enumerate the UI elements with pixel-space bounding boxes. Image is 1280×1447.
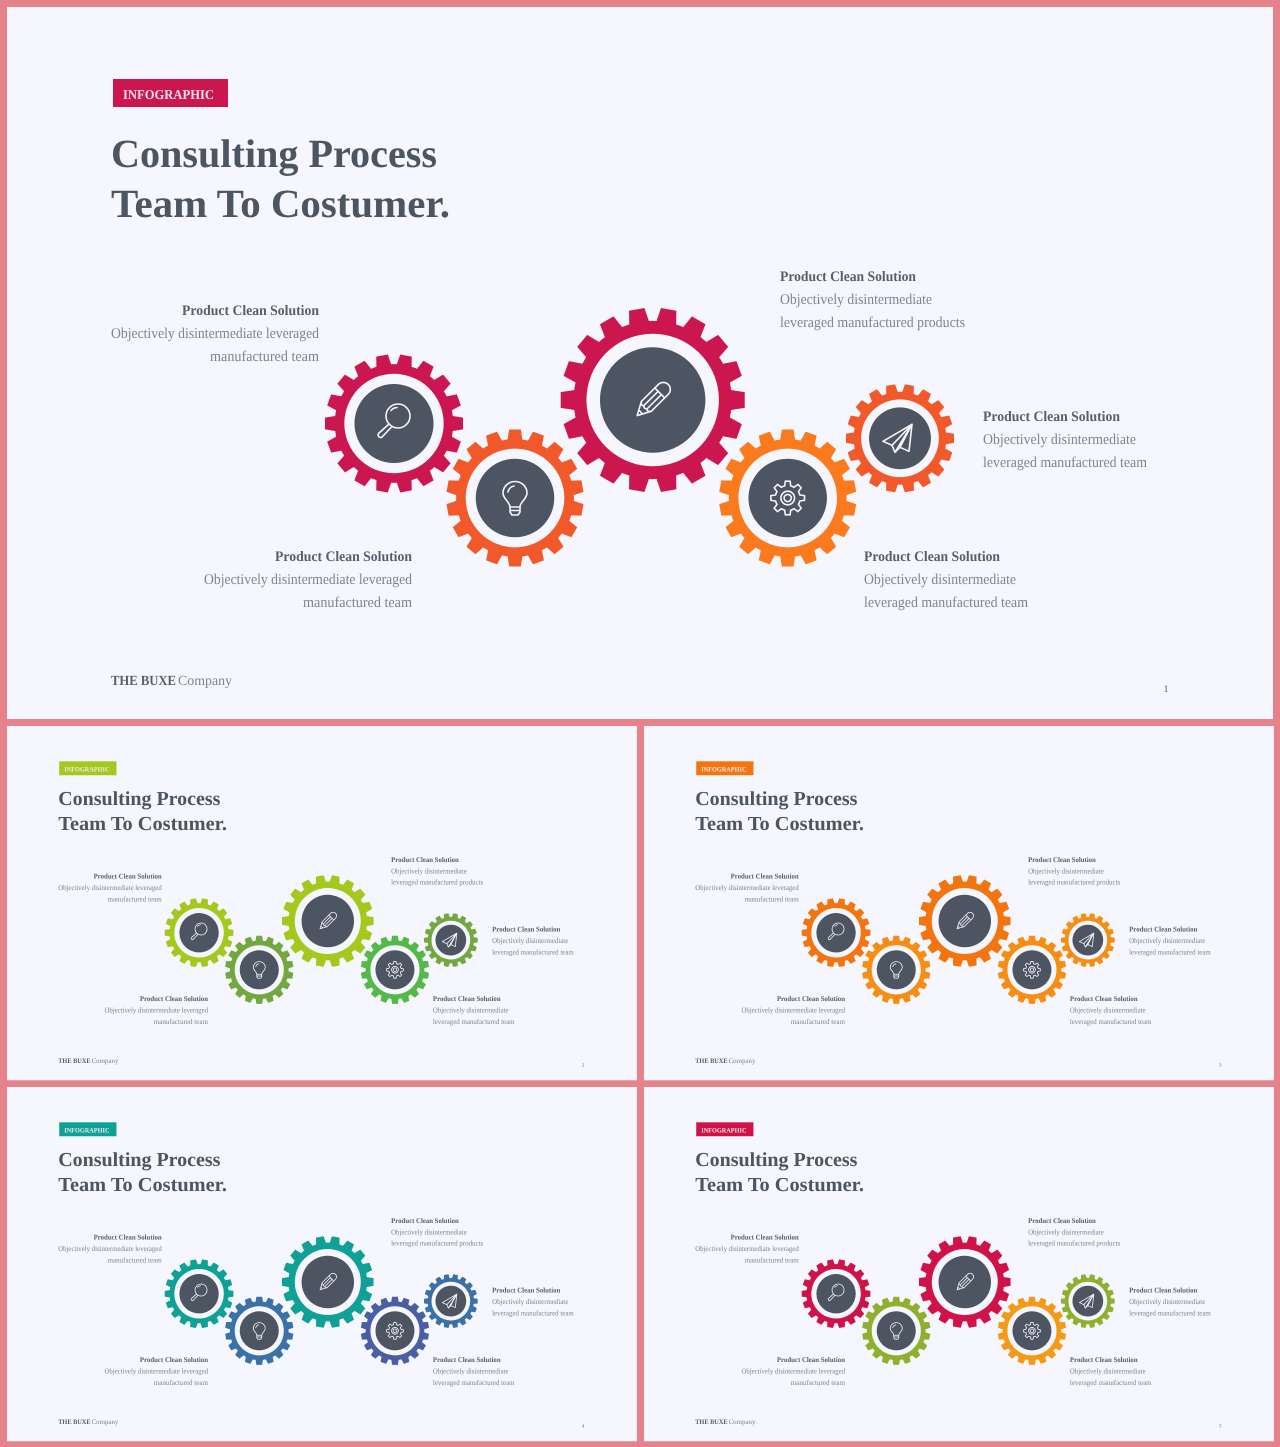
gear 4 — [361, 1297, 429, 1365]
text block: top centre: leveraged manufactured products — [1028, 1240, 1120, 1248]
gear 3 — [275, 868, 381, 974]
text block: bottom right: leveraged manufactured team — [864, 595, 1028, 611]
footer brand: THE BUXE — [695, 1057, 728, 1065]
footer brand — [695, 1057, 755, 1065]
text block: right: Objectively disintermediate — [492, 1298, 568, 1306]
icon: paper plane — [442, 933, 457, 947]
footer brand: THE BUXE — [111, 674, 176, 689]
icon: pencil — [955, 1272, 975, 1292]
text block: top left: manufactured team — [107, 896, 162, 904]
text block: top centre: leveraged manufactured products — [391, 879, 483, 887]
tag: infographic: INFOGRAPHIC — [701, 765, 746, 773]
tag: infographic: INFOGRAPHIC — [64, 1126, 109, 1134]
tag: infographic — [696, 1122, 753, 1136]
text block: bottom right: Objectively disintermediate — [864, 572, 1016, 588]
text block: bottom right: leveraged manufactured team — [1070, 1018, 1152, 1026]
gear 5 — [1057, 1270, 1119, 1332]
icon: cog — [1024, 961, 1040, 978]
text block: bottom left — [204, 549, 412, 611]
text block: top left: Product Clean Solution — [94, 873, 162, 881]
footer brand: THE BUXE — [58, 1418, 91, 1426]
icon: paper plane — [1079, 1294, 1094, 1308]
footer brand — [58, 1418, 118, 1426]
text block: bottom left — [105, 1356, 208, 1387]
text block: top centre: leveraged manufactured products — [1028, 879, 1120, 887]
gear 5 — [420, 909, 482, 971]
title: Team To Costumer. — [695, 1173, 864, 1195]
gear 2 — [862, 936, 930, 1004]
text block: bottom right — [1070, 995, 1152, 1026]
text block: top centre — [391, 856, 483, 887]
icon: pencil — [318, 911, 338, 931]
gear 4 — [998, 1297, 1066, 1365]
text block: top centre: Objectively disintermediate — [780, 292, 932, 308]
footer brand: Company — [92, 1418, 118, 1426]
gear 1 — [159, 1254, 239, 1334]
footer brand — [695, 1418, 755, 1426]
icon: magnifier — [378, 404, 410, 437]
text block: bottom left: Objectively disintermediate leveraged — [204, 572, 412, 588]
title: Team To Costumer. — [111, 181, 450, 226]
text block: top centre: Product Clean Solution — [1028, 856, 1096, 864]
icon: magnifier — [828, 1284, 844, 1301]
text block: right: Product Clean Solution — [1129, 926, 1197, 933]
footer brand: Company — [729, 1057, 755, 1065]
footer brand: THE BUXE — [58, 1057, 91, 1065]
icon: cog — [387, 1322, 403, 1339]
text block: right: leveraged manufactured team — [492, 1309, 574, 1317]
gear 5 — [837, 376, 963, 501]
text block: bottom left: manufactured team — [791, 1018, 845, 1026]
footer brand — [111, 674, 232, 689]
text block: top left — [58, 873, 162, 904]
gear 2 — [446, 430, 584, 566]
icon: magnifier — [191, 923, 207, 940]
text block: bottom left: manufactured team — [303, 595, 412, 611]
text block: right — [492, 1287, 574, 1317]
text block: top centre: leveraged manufactured products — [391, 1240, 483, 1248]
gear 5 — [1057, 909, 1119, 971]
icon: paper plane — [883, 424, 912, 452]
text block: bottom right: Objectively disintermediate — [433, 1368, 509, 1376]
text block: top centre — [780, 269, 965, 331]
footer brand — [58, 1057, 118, 1065]
icon: light bulb — [503, 482, 527, 515]
footer brand: Company — [92, 1057, 118, 1065]
text block: bottom left — [105, 995, 208, 1026]
tag: infographic: INFOGRAPHIC — [64, 765, 109, 773]
icon: cog — [771, 481, 805, 515]
text block: top left: Objectively disintermediate leveraged — [58, 1245, 162, 1253]
text block: right: leveraged manufactured team — [983, 455, 1147, 471]
text block: top left: Objectively disintermediate leveraged — [111, 326, 319, 342]
text block: bottom left: manufactured team — [154, 1018, 208, 1026]
icon: paper plane — [1079, 933, 1094, 947]
text block: bottom right: leveraged manufactured team — [1070, 1379, 1152, 1387]
gear 3 — [912, 868, 1018, 974]
title: Consulting Process — [58, 787, 220, 810]
text block: right — [1129, 1287, 1211, 1317]
tag: infographic — [59, 1122, 116, 1136]
text block: right: Objectively disintermediate — [983, 432, 1136, 448]
text block: top centre: Product Clean Solution — [1028, 1217, 1096, 1225]
footer brand: Company — [178, 674, 232, 689]
text block: top centre — [1028, 1217, 1120, 1248]
text block: top left — [695, 873, 799, 904]
panel: slide 5 multicolour — [644, 1087, 1274, 1441]
text block: bottom left: Product Clean Solution — [777, 995, 845, 1003]
text block: bottom right: leveraged manufactured team — [433, 1018, 515, 1026]
text block: bottom left: Objectively disintermediate leveraged — [742, 1007, 845, 1015]
title — [111, 131, 450, 226]
text block: bottom left: Product Clean Solution — [777, 1356, 845, 1364]
text block: top left: manufactured team — [744, 1257, 799, 1265]
page number: 2 — [582, 1062, 584, 1068]
text block: top centre: Product Clean Solution — [391, 1217, 459, 1225]
text block: top left: Objectively disintermediate leveraged — [695, 1245, 799, 1253]
tag: infographic: INFOGRAPHIC — [123, 87, 214, 102]
gear 1 — [796, 1254, 876, 1334]
text block: bottom left: manufactured team — [154, 1379, 208, 1387]
text block: bottom right: Product Clean Solution — [864, 549, 1000, 565]
text block: right: leveraged manufactured team — [492, 948, 574, 956]
text block: bottom left: Objectively disintermediate leveraged — [742, 1368, 845, 1376]
title — [695, 787, 864, 834]
icon: light bulb — [890, 962, 902, 978]
icon: magnifier — [191, 1284, 207, 1301]
gear 3 — [912, 1229, 1018, 1335]
text block: top left: Product Clean Solution — [731, 873, 799, 881]
gear 1 — [159, 893, 239, 973]
panel: slide 1 crimson (large) — [7, 7, 1273, 719]
text block: top left — [58, 1234, 162, 1265]
text block: bottom left — [742, 995, 845, 1026]
gear 3 — [275, 1229, 381, 1335]
text block: top centre: Product Clean Solution — [780, 269, 916, 285]
icon: magnifier — [828, 923, 844, 940]
icon: light bulb — [253, 962, 265, 978]
title: Consulting Process — [58, 1148, 220, 1171]
text block: right: Objectively disintermediate — [1129, 937, 1205, 945]
text block: bottom right — [433, 1356, 515, 1387]
text block: top centre — [1028, 856, 1120, 887]
text block: bottom right — [1070, 1356, 1152, 1387]
text block: bottom right: leveraged manufactured team — [433, 1379, 515, 1387]
title: Team To Costumer. — [58, 812, 227, 834]
text block: top centre: Objectively disintermediate — [391, 867, 467, 875]
text block: top left: Product Clean Solution — [182, 303, 319, 319]
icon: light bulb — [253, 1323, 265, 1339]
text block: top centre: Objectively disintermediate — [1028, 867, 1104, 875]
icon: cog — [387, 961, 403, 978]
title — [58, 1148, 227, 1195]
text block: bottom left: manufactured team — [791, 1379, 845, 1387]
text block: bottom right — [864, 549, 1028, 611]
text block: bottom right — [433, 995, 515, 1026]
tag: infographic — [59, 761, 116, 775]
text block: right: leveraged manufactured team — [1129, 948, 1211, 956]
text block: bottom right: Product Clean Solution — [433, 1356, 501, 1364]
text block: top left: manufactured team — [210, 349, 319, 365]
page number: 3 — [1219, 1062, 1221, 1068]
icon: pencil — [318, 1272, 338, 1292]
text block: top left: manufactured team — [744, 896, 799, 904]
text block: bottom left: Product Clean Solution — [140, 995, 208, 1003]
text block: top left: manufactured team — [107, 1257, 162, 1265]
gear 4 — [719, 430, 856, 566]
icon: paper plane — [442, 1294, 457, 1308]
gear 4 — [361, 936, 429, 1004]
text block: right: Objectively disintermediate — [492, 937, 568, 945]
text block: right — [1129, 926, 1211, 956]
tag: infographic: INFOGRAPHIC — [701, 1126, 746, 1134]
title: Team To Costumer. — [58, 1173, 227, 1195]
text block: bottom right: Product Clean Solution — [1070, 1356, 1138, 1364]
text block: bottom right: Product Clean Solution — [433, 995, 501, 1003]
page number: 4 — [582, 1423, 584, 1429]
text block: right: Product Clean Solution — [492, 1287, 560, 1294]
text block: top centre: Objectively disintermediate — [1028, 1228, 1104, 1236]
icon: cog — [1024, 1322, 1040, 1339]
title: Consulting Process — [695, 1148, 857, 1171]
gear 2 — [225, 1297, 293, 1365]
footer brand: Company — [729, 1418, 755, 1426]
text block: bottom left: Product Clean Solution — [275, 549, 412, 565]
page number: 1 — [1164, 684, 1168, 695]
title: Consulting Process — [695, 787, 857, 810]
text block: right — [983, 409, 1147, 471]
gear 2 — [225, 936, 293, 1004]
text block: top centre: Objectively disintermediate — [391, 1228, 467, 1236]
text block: bottom left: Objectively disintermediate leveraged — [105, 1368, 208, 1376]
footer brand: THE BUXE — [695, 1418, 728, 1426]
text block: right: Product Clean Solution — [1129, 1287, 1197, 1294]
text block: top left: Product Clean Solution — [731, 1234, 799, 1242]
text block: bottom left — [742, 1356, 845, 1387]
gear 1 — [314, 344, 474, 503]
panel: slide 3 orange — [644, 726, 1274, 1080]
text block: bottom right: Objectively disintermediate — [433, 1007, 509, 1015]
title: Team To Costumer. — [695, 812, 864, 834]
text block: right: leveraged manufactured team — [1129, 1309, 1211, 1317]
text block: top centre: Product Clean Solution — [391, 856, 459, 864]
text block: top left: Product Clean Solution — [94, 1234, 162, 1242]
tag: infographic — [113, 79, 228, 107]
gear 4 — [998, 936, 1066, 1004]
gear 2 — [862, 1297, 930, 1365]
text block: right: Product Clean Solution — [492, 926, 560, 933]
page number: 5 — [1219, 1423, 1221, 1429]
text block: top left — [695, 1234, 799, 1265]
text block: top left: Objectively disintermediate leveraged — [58, 884, 162, 892]
text block: bottom right: Objectively disintermediate — [1070, 1368, 1146, 1376]
title — [58, 787, 227, 834]
title — [695, 1148, 864, 1195]
text block: bottom left: Objectively disintermediate leveraged — [105, 1007, 208, 1015]
text block: bottom right: Objectively disintermediate — [1070, 1007, 1146, 1015]
text block: top centre: leveraged manufactured products — [780, 315, 965, 331]
text block: right: Objectively disintermediate — [1129, 1298, 1205, 1306]
title: Consulting Process — [111, 131, 437, 176]
icon: light bulb — [890, 1323, 902, 1339]
text block: right: Product Clean Solution — [983, 409, 1120, 425]
text block: top left — [111, 303, 319, 365]
icon: pencil — [955, 911, 975, 931]
text block: top centre — [391, 1217, 483, 1248]
panel: slide 4 teal — [7, 1087, 637, 1441]
text block: right — [492, 926, 574, 956]
gear 3 — [546, 293, 760, 507]
gear 5 — [420, 1270, 482, 1332]
text block: bottom right: Product Clean Solution — [1070, 995, 1138, 1003]
text block: top left: Objectively disintermediate leveraged — [695, 884, 799, 892]
icon: pencil — [632, 379, 673, 421]
tag: infographic — [696, 761, 753, 775]
panel: slide 2 green — [7, 726, 637, 1080]
text block: bottom left: Product Clean Solution — [140, 1356, 208, 1364]
gear 1 — [796, 893, 876, 973]
